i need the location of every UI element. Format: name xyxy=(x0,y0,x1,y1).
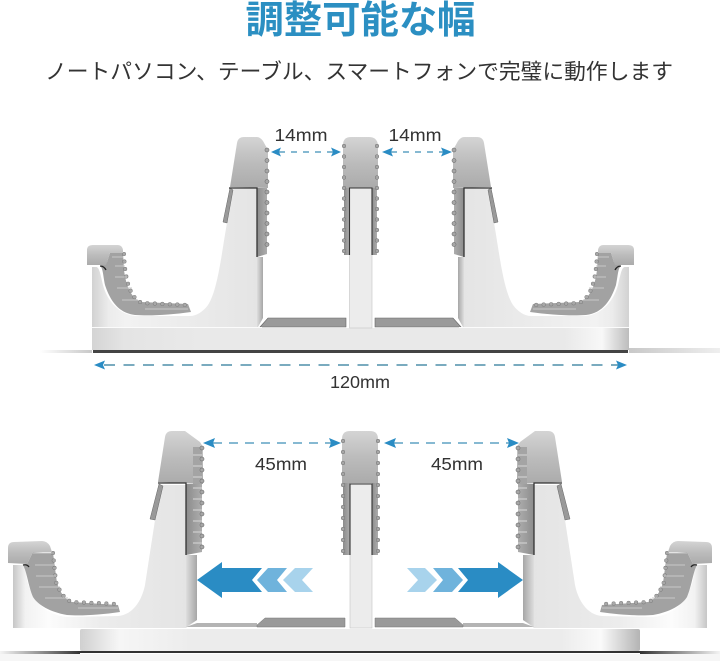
base dark edge xyxy=(80,651,640,653)
base plate xyxy=(80,629,640,651)
dimension: 14mm right: 14mm xyxy=(388,125,442,145)
centre holder xyxy=(342,431,378,628)
diagram: wide stand, 45mm slots xyxy=(0,431,720,661)
arrow: slide right xyxy=(407,562,523,598)
dimension: 14mm right xyxy=(382,125,452,156)
arrow: slide left xyxy=(197,562,313,598)
subtitle: ノートパソコン、テーブル、スマートフォンで完璧に動作します xyxy=(45,59,673,84)
floor glow xyxy=(0,654,720,661)
floor shadow right xyxy=(629,348,720,353)
centre holder xyxy=(343,137,378,328)
base plate xyxy=(92,328,629,350)
right holder xyxy=(375,431,712,628)
dimension: 120mm: 120mm xyxy=(330,372,390,392)
floor shadow left xyxy=(40,350,92,353)
dimension: 45mm right: 45mm xyxy=(431,454,483,474)
floor shadow left xyxy=(0,651,80,654)
dimension: 14mm left xyxy=(271,125,341,156)
title: 調整可能な幅 xyxy=(246,0,476,42)
dimension: 14mm left: 14mm xyxy=(274,125,328,145)
diagram: narrow stand, 14mm slots xyxy=(40,137,720,353)
dimension: 45mm left xyxy=(203,438,341,474)
dimension: 120mm xyxy=(94,360,627,392)
left holder xyxy=(87,137,346,328)
base dark edge xyxy=(93,350,628,353)
dimension: 45mm left: 45mm xyxy=(255,454,307,474)
floor shadow right xyxy=(640,651,720,654)
dimension: 45mm right xyxy=(384,438,519,474)
right holder xyxy=(375,137,634,328)
left holder xyxy=(8,431,345,628)
